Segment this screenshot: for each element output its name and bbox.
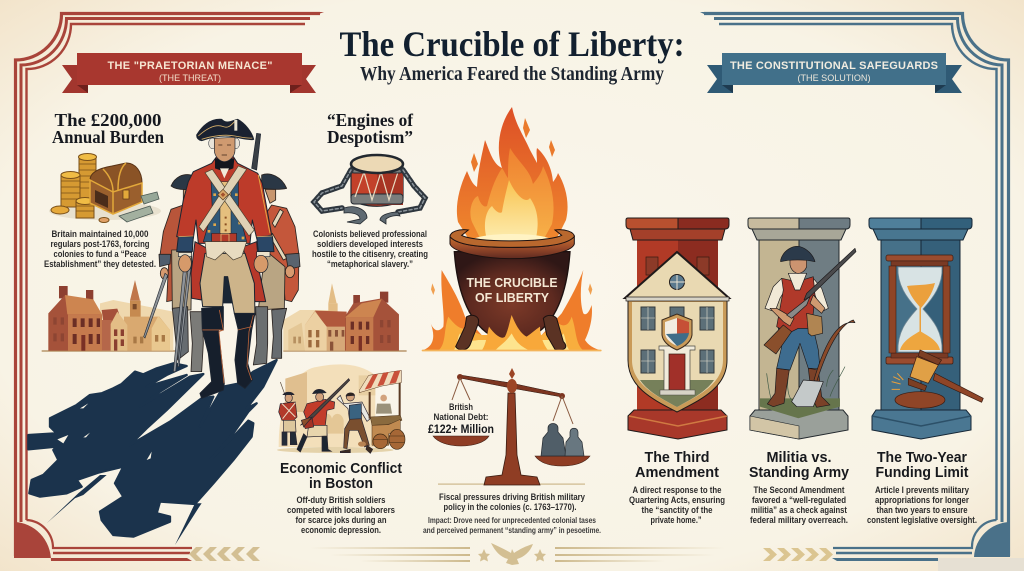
waist sash	[212, 233, 237, 242]
text: militia: The Second Amendment	[754, 485, 844, 495]
musket	[252, 133, 261, 170]
heading: third amendment: Amendment	[635, 465, 719, 481]
heading: engines of despotism: “Engines of	[327, 110, 414, 130]
blue border frame	[700, 12, 1010, 561]
text: third amendment: Quartering Acts, ensuring	[629, 495, 725, 505]
label: national debt	[428, 402, 494, 436]
illustration: balance scale	[433, 368, 590, 485]
heading: engines of despotism: Despotism”	[327, 127, 413, 147]
heading: annual burden: The £200,000	[54, 110, 162, 130]
minuteman	[760, 246, 856, 418]
back soldier: left	[159, 175, 203, 372]
heading: annual burden: Annual Burden	[52, 127, 164, 147]
red border frame	[14, 12, 324, 561]
heading: engines of despotism	[327, 110, 414, 147]
panel: annual burden	[44, 110, 164, 269]
heading: militia vs standing army: Militia vs.	[766, 450, 832, 466]
market stall	[358, 370, 405, 449]
main soldier	[177, 119, 274, 398]
panel: militia vs standing army	[748, 218, 856, 525]
icon: drum and broken chains	[314, 155, 425, 224]
hair	[209, 138, 216, 149]
heading: two-year funding limit	[876, 450, 969, 481]
panel: engines of despotism	[312, 110, 428, 269]
text: two-year funding limit	[867, 485, 977, 525]
left chevrons	[189, 547, 260, 561]
banner: the solution: THE CONSTITUTIONAL SAFEGUARDS	[730, 60, 938, 72]
illustration: market brawl	[277, 364, 405, 453]
illustration: long shadow of soldiers	[28, 360, 277, 545]
right chevrons	[763, 548, 833, 561]
text: third amendment: A direct response to the	[632, 485, 722, 495]
pot	[422, 230, 602, 351]
text: militia	[750, 485, 848, 525]
illustration: redcoat soldiers	[144, 119, 300, 398]
swords	[144, 267, 191, 372]
heading: militia vs standing army	[749, 450, 849, 481]
subtitle: Why America Feared the Standing Army	[360, 64, 664, 85]
cuffs	[177, 237, 193, 252]
heading: economic conflict: in Boston	[309, 476, 373, 492]
text: fiscal pressures: policy in the colonies (c. 1763–1770).	[444, 502, 576, 512]
text: fiscal pressures	[423, 492, 601, 535]
illustration: left town	[42, 280, 182, 352]
heading: two-year funding limit: The Two-Year	[877, 450, 967, 466]
text: fiscal pressures: and perceived permanent “standing army” in pesoetime.	[423, 526, 601, 535]
text: militia: militia” as a check against	[751, 505, 847, 515]
text: two-year funding limit: constent legislative oversight.	[867, 515, 977, 525]
fire around the base	[422, 270, 602, 351]
figure: guard soldier	[279, 382, 297, 445]
panel: british national debt	[423, 368, 601, 535]
text: engines of despotism: Colonists believed professional	[313, 229, 427, 239]
breeches	[200, 253, 255, 315]
banner: the solution	[707, 53, 962, 93]
illustration: blue pillar with hourglass and gavel	[869, 218, 983, 439]
figure: british soldier	[297, 379, 350, 452]
text: third amendment: the “sanctity of the	[642, 505, 712, 515]
heading: two-year funding limit: Funding Limit	[876, 465, 969, 481]
lapels	[203, 172, 223, 242]
text: third amendment: private home.”	[650, 515, 702, 525]
crucible label: THE CRUCIBLE	[466, 276, 558, 290]
banner: the threat: THE "PRAETORIAN MENACE"	[108, 60, 272, 72]
heading: third amendment	[635, 450, 719, 481]
stock and neck	[215, 158, 234, 172]
text: economic conflict: economic depression.	[301, 525, 381, 535]
text: militia: favored a “well-regulated	[752, 495, 846, 505]
panel: the third amendment	[625, 218, 729, 525]
text: two-year funding limit: than two years to ensure	[876, 505, 968, 515]
text: economic conflict: Off-duty British soldiers	[296, 495, 386, 505]
watermark blur patch	[938, 558, 1024, 571]
crucible label	[466, 276, 558, 305]
coat body	[177, 157, 272, 243]
text: fiscal pressures: Impact: Drove need for unprecedented colonial tases	[428, 516, 596, 525]
coat skirts	[191, 242, 210, 300]
heading: economic conflict	[280, 461, 402, 492]
heading: third amendment: The Third	[644, 450, 710, 466]
illustration: crucible with flames	[422, 107, 602, 351]
title: The Crucible of Liberty:	[340, 24, 684, 64]
bottom center ornament: eagle and stars	[310, 543, 725, 565]
label: national debt: British	[449, 402, 473, 412]
figure: laborer	[337, 393, 373, 453]
text: third amendment	[629, 485, 725, 525]
text: annual burden: Establishment” they detested.	[44, 259, 156, 269]
text: annual burden: colonies to fund a “Peace	[54, 249, 146, 259]
illustration: stone pillar with minuteman	[748, 218, 856, 439]
banner: the solution: (THE SOLUTION)	[798, 73, 870, 83]
banner: the threat	[62, 53, 316, 93]
heading: annual burden	[52, 110, 164, 147]
panel: two-year funding limit	[867, 218, 983, 525]
gavel	[892, 350, 983, 408]
back soldier: right	[253, 174, 300, 365]
heading: militia vs standing army: Standing Army	[749, 465, 849, 481]
panel: economic conflict in boston	[277, 364, 405, 535]
waistcoat	[220, 182, 231, 235]
coat lining	[222, 270, 235, 303]
illustration: right town	[283, 283, 407, 352]
face	[214, 137, 235, 162]
text: economic conflict: competed with local laborers	[287, 505, 395, 515]
crossbelts	[205, 169, 254, 236]
banner: the threat: (THE THREAT)	[159, 73, 221, 83]
text: engines of despotism	[312, 229, 428, 269]
coat flaps	[205, 242, 247, 260]
text: two-year funding limit: appropriations for longer	[875, 495, 969, 505]
text: annual burden: regulars post-1763, forcing	[50, 239, 150, 249]
heading: economic conflict: Economic Conflict	[280, 461, 402, 477]
main flame	[457, 107, 568, 246]
tricorne hat	[197, 119, 254, 141]
text: annual burden: Britain maintained 10,000	[52, 229, 148, 239]
text: two-year funding limit: Article I prevents military	[875, 485, 969, 495]
text: economic conflict	[287, 495, 395, 535]
hands	[179, 255, 191, 272]
crucible label: OF LIBERTY	[475, 291, 550, 305]
icon: coins and treasure chest	[49, 154, 161, 222]
text: engines of despotism: hostile to the citisenry, creating	[312, 249, 428, 259]
text: militia: federal military overreach.	[750, 515, 848, 525]
illustration: red pillar with shielded house	[625, 218, 729, 439]
text: engines of despotism: soldiers developed interests	[317, 239, 423, 249]
text: engines of despotism: “metaphorical slavery.”	[327, 259, 413, 269]
text: economic conflict: for scarce joks during an	[296, 515, 386, 525]
label: national debt: National Debt:	[434, 412, 488, 422]
label: national debt: £122+ Million	[428, 424, 494, 436]
text: annual burden	[44, 229, 156, 269]
boots	[200, 307, 224, 398]
hourglass	[886, 255, 953, 261]
text: fiscal pressures: Fiscal pressures driving British military	[439, 492, 585, 502]
